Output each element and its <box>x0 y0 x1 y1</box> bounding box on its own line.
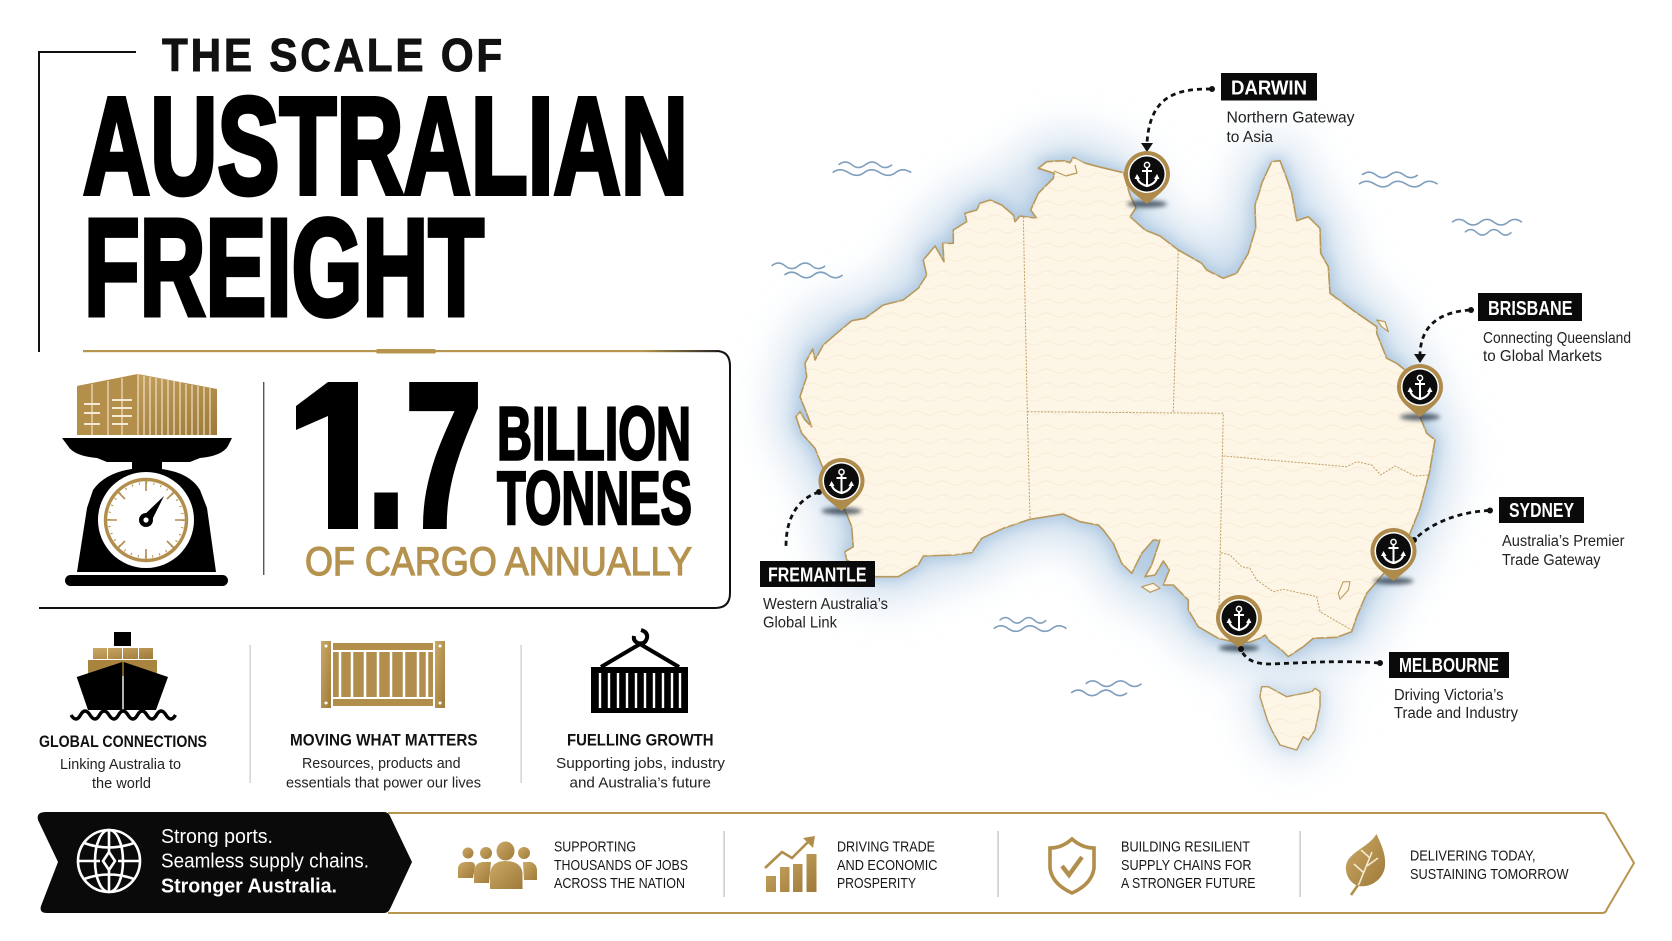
city label: FREMANTLE <box>768 564 866 586</box>
port pin <box>1124 151 1170 208</box>
ribbon item: jobs <box>458 838 688 892</box>
stat number: .7 <box>367 341 482 570</box>
description <box>1502 533 1624 569</box>
icon: globe <box>78 830 140 892</box>
heading: GLOBAL CONNECTIONS <box>39 732 207 751</box>
icon: container front <box>321 641 445 708</box>
sea waves <box>772 162 1522 696</box>
icon: people <box>458 842 537 889</box>
title line: australian: AUSTRALIAN <box>83 70 688 224</box>
callout: brisbane <box>1397 293 1631 420</box>
description: Trade and Industry <box>1394 705 1518 722</box>
icon: shipping container <box>77 374 217 435</box>
text: SUPPLY CHAINS FOR <box>1121 857 1252 874</box>
text: THOUSANDS OF JOBS <box>554 857 688 874</box>
description: Connecting Queensland <box>1483 330 1631 347</box>
stat unit: billion: BILLION <box>497 392 691 476</box>
icon: shield <box>1050 839 1094 893</box>
description <box>1483 330 1631 365</box>
description: Linking Australia to <box>60 756 181 773</box>
gold rule <box>83 350 717 352</box>
gold rule clasp <box>376 349 436 354</box>
port pin <box>1397 364 1443 420</box>
callout: darwin <box>1124 73 1355 208</box>
text: A STRONGER FUTURE <box>1121 875 1256 892</box>
connector <box>1238 646 1383 666</box>
city label: DARWIN <box>1231 76 1307 100</box>
stat number: 1 <box>295 341 380 570</box>
text: PROSPERITY <box>837 875 916 892</box>
description: Resources, products and <box>302 755 460 772</box>
divider <box>263 382 264 575</box>
map of australia <box>772 157 1522 750</box>
description: Supporting jobs, industry <box>556 755 725 772</box>
stat panel <box>39 341 730 608</box>
heading: MOVING WHAT MATTERS <box>290 730 478 750</box>
heading: FUELLING GROWTH <box>567 730 714 750</box>
port pin <box>818 458 864 514</box>
description: Western Australia’s <box>763 596 888 613</box>
description: and Australia’s future <box>570 774 711 792</box>
panel outline <box>39 351 730 608</box>
city label <box>1389 652 1509 678</box>
city label: SYDNEY <box>1509 499 1574 522</box>
panel: moving what matters <box>286 641 481 792</box>
text: BUILDING RESILIENT <box>1121 838 1250 856</box>
callout: sydney <box>1370 497 1624 584</box>
stat unit: tonnes: TONNES <box>497 456 692 540</box>
text: AND ECONOMIC <box>837 857 938 874</box>
banner text <box>161 826 369 898</box>
text: ACROSS THE NATION <box>554 875 685 892</box>
banner text: Stronger Australia. <box>161 876 337 898</box>
city label <box>1478 293 1582 321</box>
description: Australia’s Premier <box>1502 533 1624 550</box>
title line: freight: FREIGHT <box>84 191 484 345</box>
ribbon item: resilience <box>1050 838 1256 893</box>
description: Trade Gateway <box>1502 552 1601 569</box>
callout: fremantle <box>760 458 888 632</box>
port pin <box>1216 595 1262 652</box>
callout: melbourne <box>1216 595 1518 722</box>
text <box>554 838 688 892</box>
description <box>556 755 725 792</box>
text <box>837 838 938 892</box>
description <box>763 596 888 632</box>
description: to Global Markets <box>1483 348 1602 365</box>
icon: leaf <box>1346 834 1385 895</box>
description: essentials that power our lives <box>286 774 481 792</box>
black banner <box>38 812 412 913</box>
banner shape <box>38 812 412 913</box>
description <box>1394 687 1518 722</box>
description: Driving Victoria’s <box>1394 687 1504 704</box>
stat caption: OF CARGO ANNUALLY <box>305 540 692 584</box>
description: the world <box>92 775 151 792</box>
coastal glow <box>796 157 1435 750</box>
connector <box>1411 508 1493 543</box>
description <box>286 755 481 792</box>
connector <box>1414 307 1474 363</box>
title <box>83 29 688 345</box>
text: DELIVERING TODAY, <box>1410 848 1536 864</box>
description <box>60 756 181 792</box>
connector <box>786 489 822 546</box>
bottom ribbon outline <box>388 813 1634 913</box>
panel: fuelling growth <box>556 630 725 792</box>
text: SUPPORTING <box>554 838 636 856</box>
stat number <box>285 341 482 570</box>
port pin <box>1370 528 1416 584</box>
icon: weighing scale <box>62 438 232 586</box>
landmass <box>796 157 1435 750</box>
title line: the scale of: THE SCALE OF <box>162 29 505 81</box>
banner text: Seamless supply chains. <box>161 850 369 872</box>
description: Northern Gateway <box>1226 110 1355 126</box>
connector <box>1141 86 1215 152</box>
ribbon item: sustainability <box>1346 834 1569 895</box>
text <box>1121 838 1256 892</box>
description: to Asia <box>1226 129 1273 146</box>
state borders <box>1023 217 1428 630</box>
city label: MELBOURNE <box>1399 654 1499 677</box>
banner text: Strong ports. <box>161 826 273 848</box>
ribbon item: trade <box>765 836 938 892</box>
icon: craned container <box>591 630 688 713</box>
panel: global connections <box>39 632 207 792</box>
icon: cargo ship <box>71 632 176 719</box>
text <box>1410 848 1569 883</box>
description <box>1226 110 1355 146</box>
text: SUSTAINING TOMORROW <box>1410 866 1569 883</box>
text: DRIVING TRADE <box>837 838 935 856</box>
heading frame <box>39 52 136 352</box>
city label: BRISBANE <box>1488 297 1572 320</box>
description: Global Link <box>763 614 837 632</box>
icon: growth chart <box>765 836 816 892</box>
